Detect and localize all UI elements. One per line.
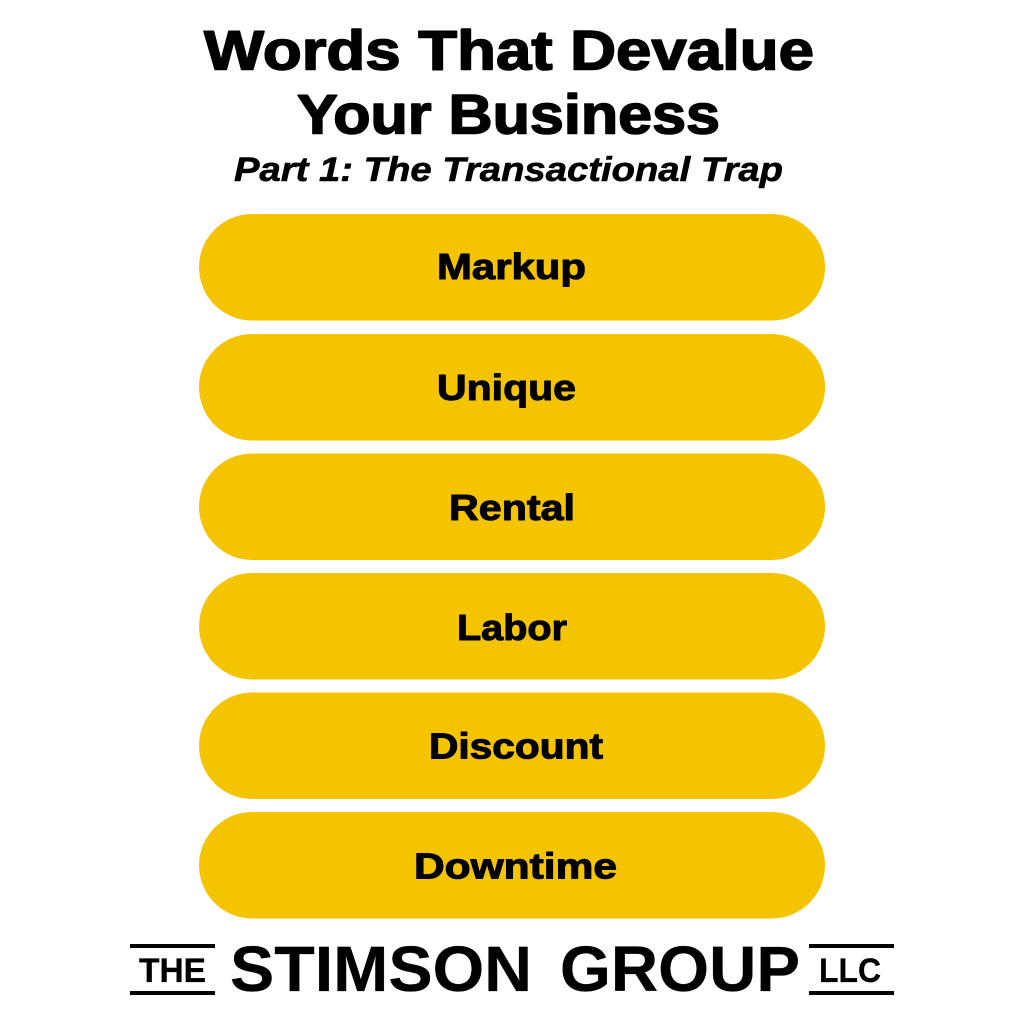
pill: Discount bbox=[199, 692, 825, 799]
word list bbox=[199, 214, 825, 918]
logo: The Stimson Group LLC: GROUP bbox=[560, 933, 800, 1005]
title: Words That Devalue bbox=[204, 18, 814, 82]
logo: The Stimson Group LLC: STIMSON bbox=[230, 933, 532, 1005]
pill: Downtime bbox=[199, 812, 825, 918]
pill: Labor bbox=[199, 573, 825, 680]
logo: The Stimson Group LLC: LLC bbox=[819, 952, 881, 990]
pill: Discount: Discount bbox=[429, 726, 603, 766]
pill: Markup bbox=[199, 214, 825, 320]
title: Your Business bbox=[297, 82, 720, 146]
pill: Unique bbox=[199, 334, 825, 440]
pill: Downtime: Downtime bbox=[414, 846, 617, 886]
title bbox=[204, 18, 814, 146]
pill: Rental: Rental bbox=[449, 487, 575, 528]
pill: Unique: Unique bbox=[437, 367, 576, 408]
subtitle: Part 1: The Transactional Trap bbox=[234, 151, 783, 189]
pill: Markup: Markup bbox=[437, 246, 586, 287]
logo: The Stimson Group LLC: THE bbox=[139, 952, 206, 990]
pill: Rental bbox=[199, 454, 825, 560]
pill: Labor: Labor bbox=[457, 607, 567, 648]
logo: The Stimson Group LLC bbox=[130, 933, 894, 1005]
